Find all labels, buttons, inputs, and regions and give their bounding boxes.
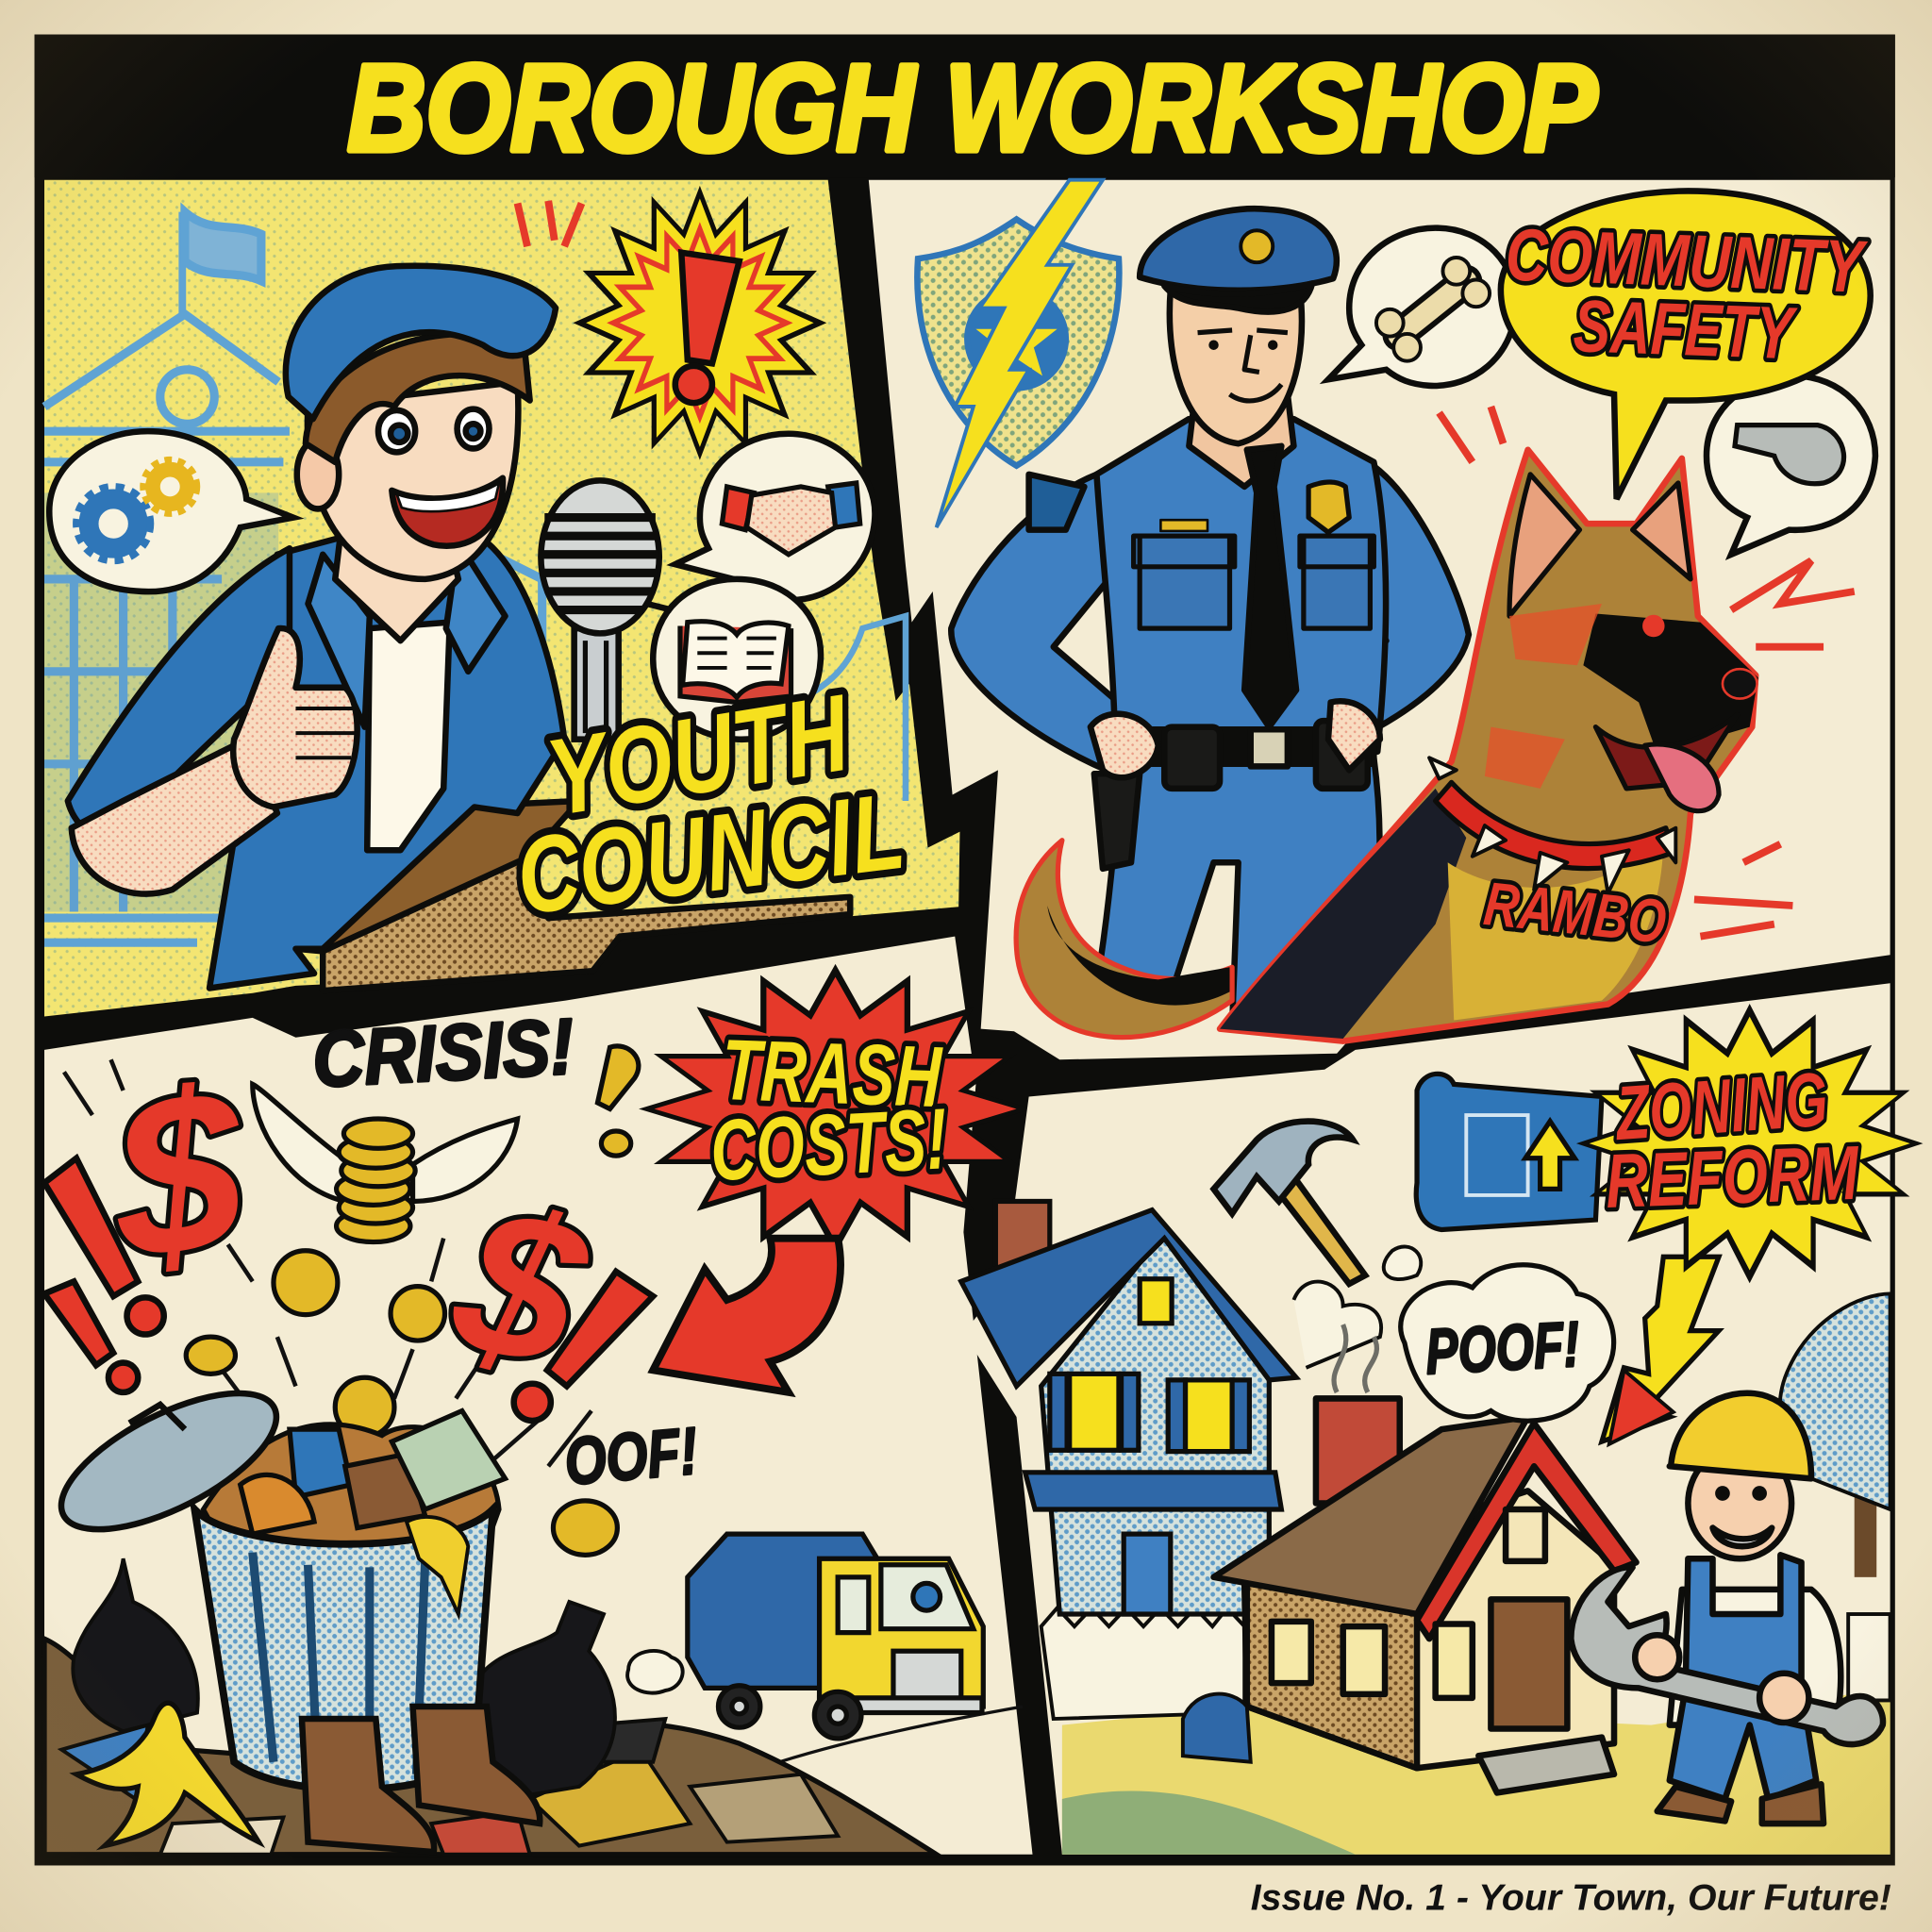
- legs: [1096, 758, 1380, 1025]
- curved red arrow: [653, 1239, 841, 1392]
- blue house: [961, 1201, 1296, 1614]
- saddle black fur: [1220, 789, 1466, 1039]
- small brown house: [1214, 1398, 1637, 1792]
- motion lines: [64, 1059, 591, 1466]
- neck: [335, 518, 458, 641]
- sleeve: [68, 548, 290, 844]
- cloud poof: [1293, 1246, 1614, 1421]
- hammer: [1214, 1122, 1365, 1284]
- belt: [1140, 729, 1374, 764]
- dog eye: [1642, 615, 1665, 637]
- speech bubble: community safety: SAFETY: [1573, 284, 1799, 375]
- panel: community safety: [869, 180, 1890, 1059]
- town hall backdrop: [44, 212, 906, 942]
- tail: [1016, 841, 1232, 1038]
- trash can lid: [42, 1366, 295, 1557]
- panel background: [44, 937, 1033, 1855]
- spiked collar: [1436, 782, 1674, 868]
- youth council label: COUNCIL: [510, 771, 910, 938]
- left pocket: [1134, 536, 1374, 628]
- youth council label: YOUTH: [540, 673, 858, 839]
- officer face details: [1198, 330, 1288, 401]
- red dollar signs and exclamations: [100, 1041, 607, 1416]
- trash can: [194, 1509, 492, 1790]
- exhaust puff: [627, 1651, 683, 1693]
- picket fence: [1041, 1607, 1244, 1719]
- podium: [295, 801, 850, 991]
- speech bubble: handshake: [675, 434, 874, 600]
- red dollar signs and exclamations: $: [433, 1159, 607, 1416]
- oof label: OOF!: [561, 1413, 701, 1499]
- ear: [297, 440, 339, 508]
- burst: trash costs: TRASH: [720, 1022, 944, 1125]
- panel background: [44, 180, 959, 1017]
- eyes: [378, 410, 415, 452]
- german shepherd rambo: [1016, 450, 1758, 1041]
- blueprint: [1416, 1074, 1602, 1230]
- head: [308, 382, 518, 579]
- wrench: [1571, 1567, 1883, 1744]
- cap: [1140, 208, 1337, 291]
- chest yellow fur: [1448, 838, 1663, 1020]
- red fur highlights: [1485, 604, 1602, 789]
- speech bubble: community safety: [1501, 191, 1871, 499]
- shoulder patch: [1029, 475, 1084, 530]
- tie: [1244, 446, 1296, 727]
- speech bubble: book: [647, 579, 821, 740]
- ears: [1509, 475, 1579, 616]
- hands: [1091, 714, 1158, 777]
- red dollar signs and exclamations: $: [100, 1041, 257, 1308]
- tongue: [1645, 744, 1719, 811]
- dog body: [1220, 450, 1756, 1041]
- garbage pile: [44, 1639, 937, 1855]
- burst: zoning reform: [1576, 1004, 1923, 1283]
- open mouth: [391, 478, 503, 546]
- boots: [302, 1707, 540, 1852]
- bush: [1183, 1694, 1251, 1762]
- burst: trash costs: COSTS!: [708, 1091, 949, 1199]
- overflowing trash contents: [204, 1411, 506, 1577]
- gold coins: [186, 1046, 639, 1555]
- youth figure: [68, 266, 564, 989]
- lightning pointer: [1602, 1257, 1719, 1441]
- black garbage bags: [73, 1558, 615, 1799]
- cap: [286, 266, 556, 419]
- rambo label: RAMBO: [1481, 869, 1670, 957]
- neck: [1189, 394, 1293, 487]
- garbage truck: [688, 1534, 983, 1739]
- burst: trash costs: [639, 964, 1032, 1254]
- panel: trash costs: [42, 937, 1033, 1855]
- dollar bills: [391, 1411, 506, 1509]
- crisis label: CRISIS!: [310, 1002, 576, 1104]
- police officer: [951, 208, 1469, 1025]
- road: [591, 1707, 1023, 1855]
- title banner: [35, 35, 1895, 177]
- lawn: [1062, 1688, 1890, 1855]
- youth council label: [510, 673, 910, 938]
- tree: [1780, 1293, 1890, 1577]
- microphone: [541, 480, 659, 740]
- panel background: [963, 983, 1890, 1855]
- poof label: POOF!: [1424, 1309, 1581, 1388]
- footer caption: Issue No. 1 - Your Town, Our Future!: [1251, 1877, 1891, 1918]
- flying money stack with wings: [253, 1084, 518, 1242]
- head: [1170, 290, 1302, 443]
- shield badge with lightning: [917, 180, 1119, 527]
- badge: [1308, 482, 1349, 532]
- nose: [1723, 669, 1757, 699]
- speech bubble: whistle: [1707, 375, 1875, 555]
- title: BOROUGH WORKSHOP: [347, 39, 1598, 176]
- thumbs up hand: [233, 628, 358, 808]
- jacket collar: [308, 542, 506, 727]
- arm right: [1324, 462, 1469, 740]
- white tee: [367, 623, 450, 850]
- red action marks: [1440, 407, 1855, 937]
- holster: [1094, 774, 1140, 869]
- burst: zoning reform: REFORM: [1605, 1131, 1861, 1224]
- jacket torso: [209, 530, 564, 989]
- torso: [1096, 419, 1386, 758]
- burst: exclamation: [518, 186, 826, 460]
- worker: [1571, 1393, 1883, 1824]
- black muzzle and mask: [1583, 613, 1758, 754]
- panel: zoning reform: [961, 983, 1923, 1855]
- burst: zoning reform: ZONING: [1611, 1058, 1830, 1157]
- hair: [306, 334, 530, 462]
- banana peel: [76, 1703, 258, 1846]
- yellow slime: [407, 1517, 468, 1614]
- speech bubble: gears: [49, 431, 293, 591]
- speech bubble: bone: [1328, 228, 1516, 386]
- mouth: [1595, 715, 1738, 789]
- arm left: [951, 475, 1140, 770]
- panel background: [869, 180, 1890, 1059]
- panel: youth council: [44, 180, 959, 1017]
- pointer tip: [1609, 1370, 1674, 1444]
- forearm: [72, 740, 277, 894]
